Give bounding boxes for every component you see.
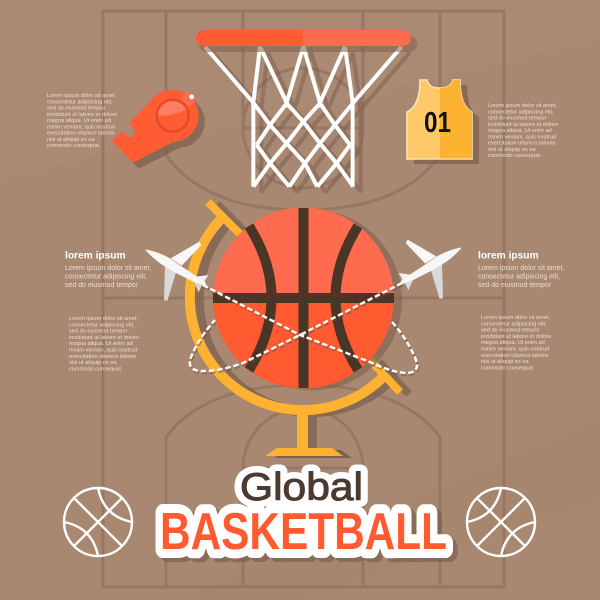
text block: top left: commodo consequat. bbox=[47, 143, 101, 149]
text block: middle right: consectetur adipiscing elit, bbox=[478, 274, 560, 280]
net shadow bbox=[213, 53, 410, 193]
icon: right basketball outline bbox=[453, 474, 549, 570]
text block: top right: magna aliqua. Ut enim ad bbox=[488, 128, 552, 134]
net bbox=[205, 47, 402, 187]
text block: top right: incididunt ut labore et dolore bbox=[488, 122, 558, 128]
text block: lower right: magna aliqua. Ut enim ad bbox=[481, 340, 545, 346]
text block: lower left: minim veniam, quis nostrud bbox=[69, 348, 137, 354]
globe stand bbox=[190, 202, 409, 458]
text block: lower right: minim veniam, quis nostrud bbox=[481, 346, 549, 352]
text block: middle right: Lorem ipsum dolor sit amet, bbox=[478, 265, 564, 272]
dashed flight paths bbox=[190, 283, 418, 375]
text block: top right: minim veniam, quis nostrud bbox=[488, 134, 556, 140]
basketball globe bbox=[213, 208, 402, 390]
title: BASKETBALL bbox=[164, 507, 452, 565]
title: Global bbox=[240, 466, 363, 509]
jersey number 01 bbox=[407, 80, 479, 164]
title: BASKETBALL bbox=[160, 503, 447, 561]
basketball hoop and net bbox=[196, 30, 417, 193]
text block: top left: nisi ut aliquip ex ea bbox=[47, 137, 95, 143]
whistle bbox=[112, 90, 205, 169]
text block: lower right: sed do eiusmod tempor bbox=[481, 328, 540, 334]
text block: top left: incididunt ut labore et dolore bbox=[47, 112, 117, 118]
text block: middle left: Lorem ipsum dolor sit amet, bbox=[65, 265, 151, 272]
text block: lower left: exercitation ullamco laboris bbox=[69, 354, 137, 360]
text block: lower right: consectetur adipiscing elit, bbox=[481, 321, 547, 327]
text block: lower right: commodo consequat. bbox=[481, 365, 535, 371]
right airplane bbox=[399, 240, 462, 299]
text block: top left: Lorem ipsum dolor sit amet, bbox=[47, 93, 116, 99]
basketball court lines bbox=[103, 11, 504, 587]
text block: lower right: Lorem ipsum dolor sit amet, bbox=[481, 315, 550, 321]
title bbox=[160, 466, 452, 565]
text block: top right: commodo consequat. bbox=[488, 153, 542, 159]
text block: top left: minim veniam, quis nostrud bbox=[47, 124, 115, 130]
left airplane bbox=[145, 242, 208, 301]
text block: middle right: sed do eiusmod tempor bbox=[478, 282, 552, 289]
text block: top left: magna aliqua. Ut enim ad bbox=[47, 118, 111, 124]
text block: top right: sed do eiusmod tempor bbox=[488, 116, 547, 122]
text block: top right: consectetur adipiscing elit, bbox=[488, 109, 554, 115]
text block: lower left: incididunt ut labore et dolore bbox=[69, 335, 139, 341]
text block: lower right: exercitation ullamco laboris bbox=[481, 353, 549, 359]
text block: top left: consectetur adipiscing elit, bbox=[47, 99, 113, 105]
text block: middle left: consectetur adipiscing elit, bbox=[65, 274, 147, 280]
text block: middle left: sed do eiusmod tempor bbox=[65, 282, 139, 289]
text block: lower left: nisi ut aliquip ex ea bbox=[69, 360, 117, 366]
text block: top right: nisi ut aliquip ex ea bbox=[488, 147, 536, 153]
heading: right lorem ipsum: lorem ipsum bbox=[478, 250, 539, 262]
text block: lower right: nisi ut aliquip ex ea bbox=[481, 359, 529, 365]
text block: lower left: commodo consequat. bbox=[69, 366, 123, 372]
text block: lower left: Lorem ipsum dolor sit amet, bbox=[69, 316, 138, 322]
icon: left basketball outline bbox=[50, 474, 146, 570]
text block: top left: sed do eiusmod tempor bbox=[47, 106, 106, 112]
title: Global bbox=[240, 466, 363, 509]
heading: left lorem ipsum: lorem ipsum bbox=[65, 250, 126, 262]
text block: top right: exercitation ullamco laboris bbox=[488, 140, 556, 146]
text block: lower left: magna aliqua. Ut enim ad bbox=[69, 341, 133, 347]
rim bbox=[196, 30, 417, 52]
text block: lower left: consectetur adipiscing elit, bbox=[69, 322, 135, 328]
jersey number 01: 01 bbox=[424, 107, 451, 139]
title: BASKETBALL bbox=[160, 503, 447, 561]
text block: top right: Lorem ipsum dolor sit amet, bbox=[488, 103, 557, 109]
text block: lower right: incididunt ut labore et dolore bbox=[481, 334, 551, 340]
text block: top left: exercitation ullamco laboris bbox=[47, 130, 115, 136]
text block: lower left: sed do eiusmod tempor bbox=[69, 329, 128, 335]
